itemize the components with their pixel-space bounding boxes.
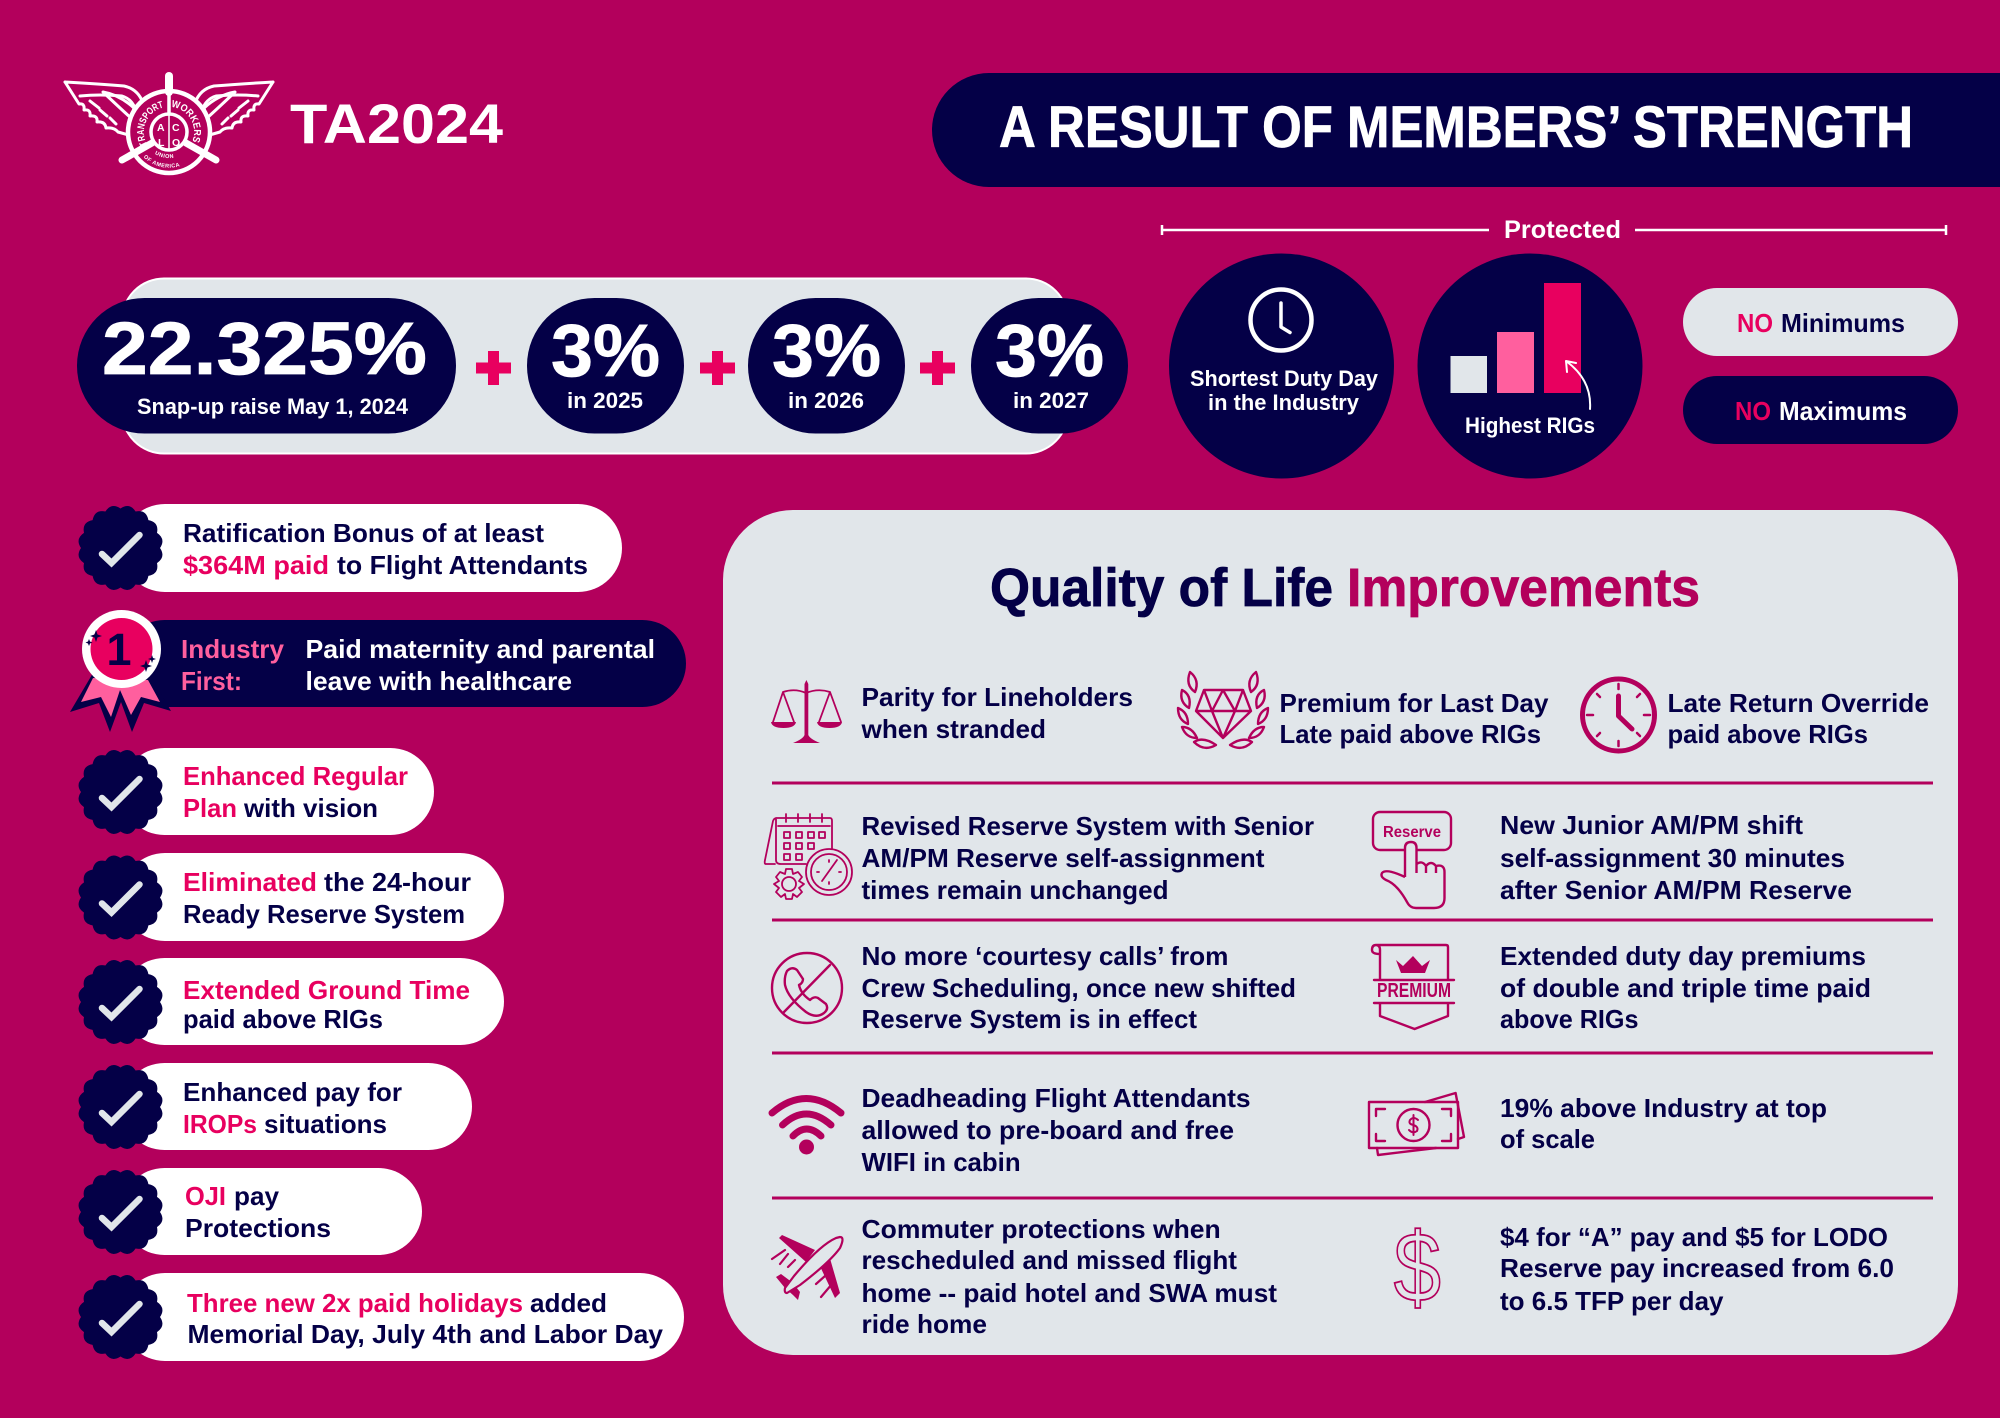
protected bracket heading — [1162, 216, 1946, 244]
list item: ratification bonus: $364M paid — [183, 550, 329, 580]
text: parity: when stranded — [860, 714, 1046, 744]
list item: extended ground time: paid above RIGs — [183, 1004, 383, 1034]
text: premium for last day: Premium for Last Day — [1280, 688, 1549, 718]
no maximums pill: NO — [1735, 396, 1771, 426]
text: revised reserve system: Revised Reserve System with Senior — [862, 811, 1314, 841]
icon: reserve button with hand: Reserve — [1383, 824, 1441, 841]
icon: wifi — [772, 1098, 841, 1154]
panel heading: Improvements — [1347, 558, 1700, 618]
no minimums pill: NO — [1737, 308, 1773, 338]
text: premium for last day: Late paid above RIGs — [1280, 719, 1541, 749]
text: 19 percent above industry: of scale — [1500, 1124, 1595, 1154]
text: new junior shift: New Junior AM/PM shift — [1500, 810, 1803, 840]
list item: enhanced IROPs pay — [79, 1063, 472, 1150]
3 percent in 2026: in 2026 — [788, 388, 864, 413]
list item: OJI pay protections: OJI — [185, 1181, 226, 1211]
text: parity — [860, 682, 1133, 744]
list item: extended ground time — [79, 958, 504, 1045]
list item: industry first maternity leave: leave with healthcare — [306, 666, 572, 696]
text: commuter protections: ride home — [862, 1309, 987, 1339]
22.325 percent pill — [77, 298, 456, 434]
text: deadheading — [862, 1083, 1251, 1177]
icon: number one medal: 1 — [106, 624, 132, 675]
list item: ratification bonus: Ratification Bonus of at least — [183, 518, 544, 548]
icon: no phone calls — [772, 953, 842, 1023]
icon: number one medal — [70, 610, 171, 732]
3 percent in 2026 — [748, 298, 905, 434]
list item: industry first maternity leave: First: — [181, 666, 242, 696]
text: revised reserve system — [862, 811, 1314, 905]
icon: money bills — [1369, 1093, 1464, 1155]
text: no more courtesy calls: Crew Scheduling, once new shifted — [862, 973, 1296, 1003]
logo: Transport Workers Union: WORKERS — [172, 100, 201, 142]
icon: reserve button with hand — [1373, 812, 1451, 908]
list item: industry first maternity leave: Industry — [181, 634, 285, 664]
protected: shortest duty day — [1169, 254, 1394, 478]
panel heading — [990, 558, 1700, 618]
3 percent in 2027 — [971, 298, 1128, 434]
plus sign — [476, 351, 511, 385]
text: extended duty day premiums: Extended duty day premiums — [1500, 941, 1866, 971]
logo: Transport Workers Union: TRANSPORT — [137, 100, 162, 146]
list item: paid holidays — [79, 1273, 684, 1361]
list item: enhanced regular plan: with vision — [243, 793, 378, 823]
logo: Transport Workers Union: O — [172, 137, 180, 149]
icon: clock — [1582, 679, 1654, 751]
protected: highest RIGs bar chart — [1418, 254, 1642, 478]
icon: airplane — [772, 1235, 842, 1300]
text: extended duty day premiums: of double and triple time paid — [1500, 973, 1871, 1003]
list item: paid holidays: Memorial Day, July 4th and Labor Day — [188, 1319, 664, 1349]
3 percent in 2027: in 2027 — [1013, 388, 1089, 413]
list item: enhanced IROPs pay: IROPs — [183, 1109, 257, 1139]
no maximums pill: Maximums — [1779, 396, 1907, 426]
brand title TA2024: TA2024 — [290, 92, 503, 155]
logo: Transport Workers Union: OF AMERICA — [144, 155, 180, 168]
protected: shortest duty day: in the Industry — [1208, 390, 1360, 415]
logo: Transport Workers Union: A — [157, 122, 165, 134]
text: reserve pay — [1500, 1222, 1894, 1316]
list item: enhanced regular plan: Enhanced Regular — [183, 761, 408, 791]
list item: enhanced IROPs pay: Enhanced pay for — [183, 1077, 402, 1107]
3 percent in 2025: 3% — [551, 309, 660, 392]
text: commuter protections — [862, 1214, 1277, 1339]
list item: enhanced regular plan — [79, 748, 434, 835]
list item: OJI pay protections — [79, 1168, 422, 1255]
protected bracket heading: Protected — [1504, 216, 1621, 244]
text: late return override: paid above RIGs — [1668, 719, 1868, 749]
text: no more courtesy calls — [862, 941, 1296, 1034]
text: deadheading: WIFI in cabin — [862, 1147, 1021, 1177]
list item: ratification bonus — [79, 504, 622, 592]
panel: wage raises — [77, 278, 1128, 454]
text: reserve pay: Reserve pay increased from 6.0 — [1500, 1253, 1894, 1283]
icon: balance scales — [771, 680, 842, 743]
list item: paid holidays: added — [530, 1288, 607, 1318]
3 percent in 2025 — [527, 298, 684, 434]
list item: ratification bonus: to Flight Attendants — [337, 550, 588, 580]
text: premium for last day — [1280, 688, 1549, 749]
text: 19 percent above industry — [1500, 1093, 1827, 1154]
text: commuter protections: Commuter protections when — [862, 1214, 1221, 1244]
text: commuter protections: home -- paid hotel and SWA must — [862, 1278, 1277, 1308]
text: reserve pay: to 6.5 TFP per day — [1500, 1286, 1724, 1316]
panel: quality of life improvements — [723, 510, 1958, 1355]
icon: calendar clock gear — [765, 814, 852, 899]
text: extended duty day premiums — [1500, 941, 1871, 1034]
3 percent in 2027: 3% — [995, 309, 1104, 392]
list item: industry first maternity leave — [121, 620, 686, 707]
panel heading: Quality of Life — [990, 558, 1333, 618]
text: late return override: Late Return Override — [1668, 688, 1929, 718]
22.325 percent pill: Snap-up raise May 1, 2024 — [137, 394, 409, 419]
text: deadheading: allowed to pre-board and free — [862, 1115, 1234, 1145]
text: reserve pay: $4 for “A” pay and $5 for LODO — [1500, 1222, 1888, 1252]
text: no more courtesy calls: No more ‘courtesy calls’ from — [862, 941, 1228, 971]
text: revised reserve system: times remain unchanged — [862, 875, 1168, 905]
list item: enhanced regular plan: Plan — [183, 793, 237, 823]
list item: OJI pay protections: Protections — [185, 1213, 331, 1243]
icon: premium banner: PREMIUM — [1377, 980, 1451, 1002]
text: 19 percent above industry: 19% above Industry at top — [1500, 1093, 1827, 1123]
no minimums pill: Minimums — [1781, 308, 1905, 338]
text: new junior shift: self-assignment 30 minutes — [1500, 843, 1845, 873]
text: extended duty day premiums: above RIGs — [1500, 1004, 1638, 1034]
list item: eliminated ready reserve — [79, 853, 504, 941]
plus sign — [920, 351, 955, 385]
list item: enhanced IROPs pay: situations — [264, 1109, 387, 1139]
text: revised reserve system: AM/PM Reserve self-assignment — [862, 843, 1265, 873]
22.325 percent pill: 22.325% — [102, 307, 427, 390]
plus sign — [700, 351, 735, 385]
text: deadheading: Deadheading Flight Attendants — [862, 1083, 1251, 1113]
logo: Transport Workers Union: L — [158, 137, 165, 149]
list item: OJI pay protections: pay — [234, 1181, 280, 1211]
3 percent in 2026: 3% — [772, 309, 881, 392]
list item: eliminated ready reserve: the 24-hour — [324, 867, 471, 897]
text: commuter protections: rescheduled and missed flight — [862, 1245, 1237, 1275]
list item: eliminated ready reserve: Eliminated — [183, 867, 317, 897]
list item: industry first maternity leave: Paid maternity and parental — [306, 634, 655, 664]
logo: Transport Workers Union — [63, 72, 275, 176]
list item: paid holidays: Three new 2x paid holidays — [187, 1288, 523, 1318]
icon: diamond with laurel — [1178, 672, 1268, 748]
list item: extended ground time: Extended Ground Time — [183, 975, 470, 1005]
no maximums pill — [1683, 376, 1958, 444]
icon: dollar sign: $ — [1394, 1212, 1441, 1322]
list item: eliminated ready reserve: Ready Reserve System — [183, 899, 465, 929]
title banner — [932, 73, 2000, 187]
no minimums pill — [1683, 288, 1958, 356]
text: new junior shift — [1500, 810, 1852, 905]
3 percent in 2025: in 2025 — [567, 388, 643, 413]
text: late return override — [1668, 688, 1929, 749]
logo: Transport Workers Union: C — [172, 122, 180, 134]
text: parity: Parity for Lineholders — [862, 682, 1133, 712]
text: no more courtesy calls: Reserve System is in effect — [862, 1004, 1197, 1034]
icon: premium banner — [1372, 945, 1454, 1029]
protected: shortest duty day: Shortest Duty Day — [1190, 366, 1379, 391]
text: new junior shift: after Senior AM/PM Reserve — [1500, 875, 1852, 905]
logo: Transport Workers Union: UNION — [155, 150, 174, 158]
protected: highest RIGs bar chart: Highest RIGs — [1465, 413, 1595, 438]
